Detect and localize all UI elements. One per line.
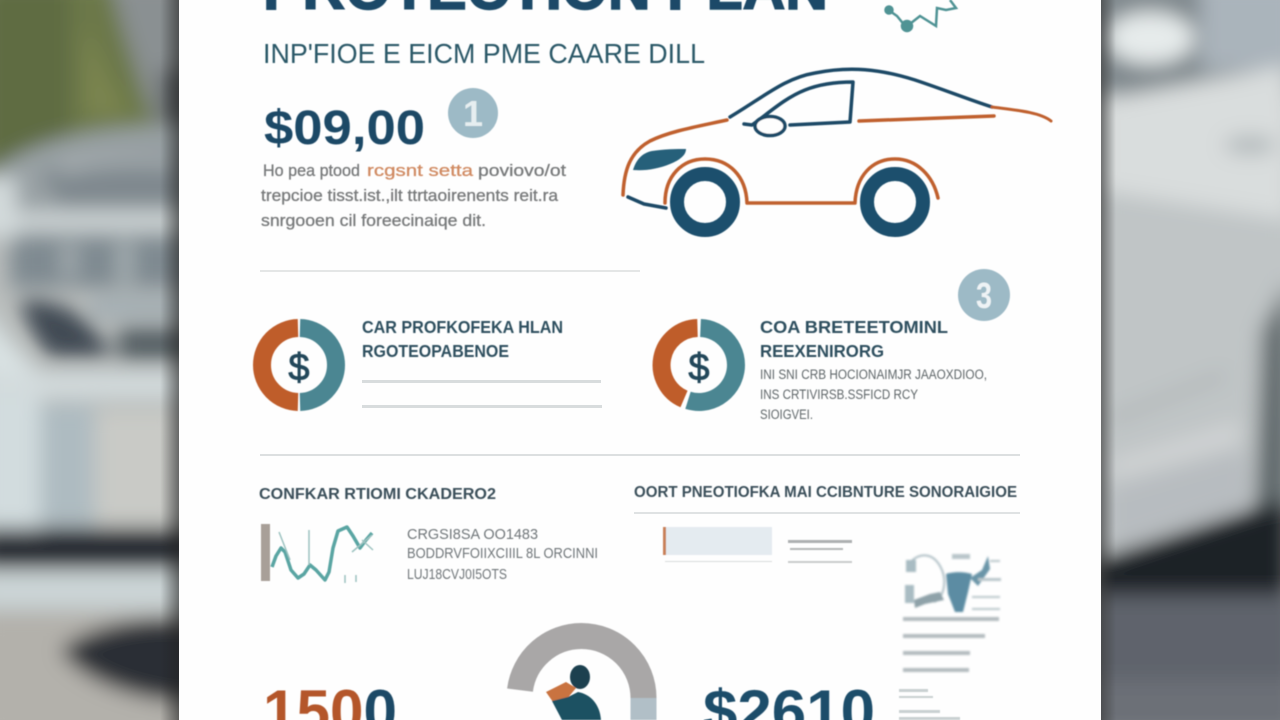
text block: intro paragraph: rcgsnt setta	[367, 161, 474, 180]
section heading: right: OORT PNEOTIOFKA MAI CCIBNTURE SONORAIGIOE	[634, 484, 1017, 501]
chart: teal line sparkline	[261, 524, 373, 583]
subtitle: INP'FIOE E EICM PME CAARE DILL	[263, 38, 705, 69]
blurred photo background: right side	[1090, 0, 1280, 720]
blurred photo background: left side	[0, 0, 200, 720]
text block: right plan heading and details: REEXENIRORG	[760, 341, 884, 361]
text block: right plan heading and details: COA BRETEETOMINL	[760, 317, 948, 337]
divider	[634, 512, 1020, 514]
text block: chart note: LUJ18CVJ0I5OTS	[407, 567, 507, 583]
chart: right donut with dollar sign	[662, 328, 736, 402]
text block: right plan heading and details: INI SNI CRB HOCIONAIMJR JAAOXDIOO,	[760, 367, 987, 382]
divider	[260, 270, 640, 272]
badge 1: 1	[463, 93, 483, 134]
text block: chart note: BODDRVFOIIXCIIIL 8L ORCINNI	[407, 546, 598, 562]
text block: intro paragraph	[261, 161, 566, 230]
badge 2	[958, 269, 1010, 321]
text block: chart note	[407, 527, 598, 583]
section heading: left: CONFKAR RTIOMI CKADERO2	[259, 486, 496, 503]
text block: right plan heading and details: SIOIGVEI.	[760, 407, 813, 422]
chart: world map with data rows	[903, 554, 1001, 672]
chart: right donut with dollar sign: $	[688, 347, 710, 389]
text block: left plan heading	[362, 317, 563, 361]
badge 2: 3	[976, 275, 992, 316]
icon: teal squiggle	[886, 0, 956, 31]
chart: left donut with dollar sign: $	[288, 347, 310, 389]
icon: car outline	[623, 69, 1051, 230]
badge 1	[448, 88, 498, 138]
text block: intro paragraph: poviovo/ot	[478, 161, 566, 180]
panel: white infographic sheet	[179, 0, 1101, 720]
price: $09,00	[264, 102, 425, 155]
text block: intro paragraph: Ho pea ptood	[263, 161, 360, 180]
chart: left donut with dollar sign	[262, 328, 336, 402]
text block: left plan heading: RGOTEOPABENOE	[362, 341, 509, 361]
divider	[260, 454, 1020, 456]
text block: intro paragraph: trepcioe tisst.ist.,ilt ttrtaoirenents reit.ra	[261, 186, 559, 205]
text block: intro paragraph: snrgooen cil foreecinaiqe dit.	[261, 211, 486, 230]
text block: right plan heading and details: INS CRTIVIRSB.SSFICD RCY	[760, 387, 918, 402]
text block: right plan heading and details	[760, 317, 987, 422]
text block: left plan heading: CAR PROFKOFEKA HLAN	[362, 317, 563, 337]
chart: gauge arc with person	[520, 636, 656, 720]
text block: chart note: CRGSI8SA OO1483	[407, 527, 538, 543]
chart: horizontal bar with legend lines	[663, 527, 852, 563]
placeholder lines	[362, 380, 602, 408]
legend lines beside statistic	[899, 689, 960, 720]
